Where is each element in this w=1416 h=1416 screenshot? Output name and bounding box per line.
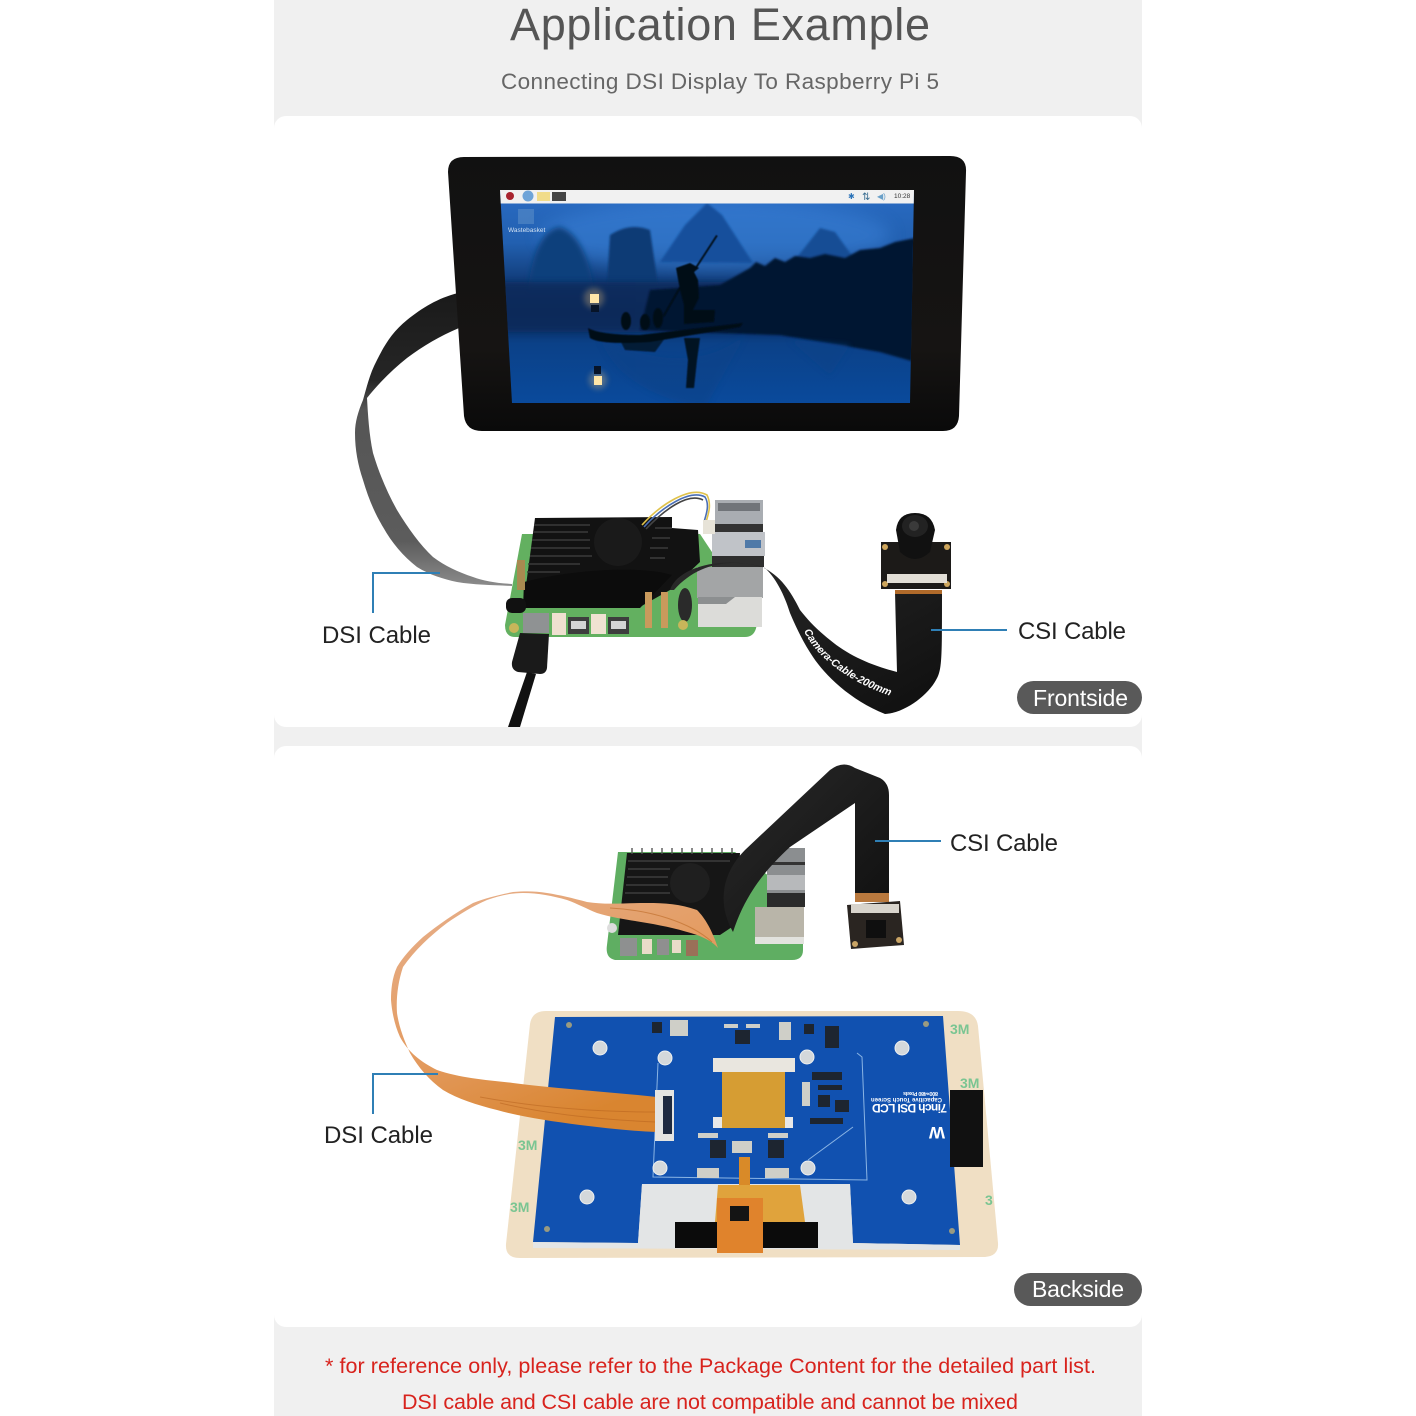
badge: Backside: Backside bbox=[1032, 1276, 1124, 1302]
blue PCB bbox=[533, 1016, 960, 1245]
lanterns bbox=[584, 288, 604, 308]
screen wallpaper: ◀) bbox=[877, 192, 886, 201]
display, front bbox=[448, 156, 966, 431]
badge: Frontside bbox=[1017, 681, 1142, 714]
standoffs and screws bbox=[580, 1041, 916, 1204]
DSI connector bbox=[655, 1090, 674, 1141]
exposed panel bbox=[533, 1184, 960, 1250]
screen wallpaper: ⇅ bbox=[862, 192, 870, 203]
screen wallpaper bbox=[498, 189, 916, 408]
boat and fisherman bbox=[588, 235, 743, 388]
badge: Frontside: Frontside bbox=[1033, 685, 1128, 711]
infographic canvas bbox=[274, 0, 1142, 1416]
DSI flex cable, back bbox=[391, 891, 718, 1132]
Raspberry Pi 5, back view bbox=[607, 848, 805, 960]
title: Application Example bbox=[510, 0, 930, 50]
page background panel bbox=[274, 0, 1142, 1416]
printed tape marks: 3M bbox=[960, 1075, 979, 1091]
DSI ribbon cable, front bbox=[355, 293, 512, 586]
CSI ribbon cable, front bbox=[670, 564, 942, 714]
panel: frontside bbox=[274, 116, 1142, 727]
callout: DSI cable front: DSI Cable bbox=[322, 622, 431, 649]
fan wires bbox=[642, 492, 709, 529]
callout: CSI cable front: CSI Cable bbox=[1018, 618, 1126, 645]
black tape right bbox=[950, 1090, 983, 1167]
printed tape marks: 3 bbox=[985, 1192, 993, 1208]
panel: backside bbox=[274, 746, 1142, 1327]
silkscreen: 7inch DSI LCD bbox=[872, 1101, 947, 1115]
silkscreen: W bbox=[928, 1123, 945, 1142]
screen wallpaper: 10:28 bbox=[894, 193, 911, 200]
touch flex bbox=[675, 1157, 818, 1253]
cable printing: Camera-Cable-200mm bbox=[805, 630, 892, 696]
heatsink with fan bbox=[523, 517, 700, 608]
footnote: DSI cable and CSI cable are not compatible and cannot be mixed bbox=[402, 1390, 1018, 1414]
camera module, back bbox=[847, 893, 904, 949]
silkscreen: Capacitive Touch Screen bbox=[871, 1096, 942, 1102]
components bbox=[652, 1022, 849, 1158]
display FFC bbox=[713, 1058, 795, 1128]
CSI ribbon cable, back bbox=[724, 764, 889, 932]
callout: DSI cable back bbox=[324, 1074, 438, 1149]
LCD panel back bbox=[506, 1011, 998, 1258]
USB-C plug and power cable bbox=[508, 613, 549, 727]
callout: DSI cable back: DSI Cable bbox=[324, 1122, 433, 1149]
outline trace bbox=[653, 1053, 867, 1180]
adhesive backing bbox=[506, 1011, 998, 1258]
callout: DSI cable front bbox=[322, 573, 440, 649]
desktop icon bbox=[518, 209, 534, 224]
footnote: * for reference only, please refer to the Package Content for the detailed part list. bbox=[325, 1354, 1096, 1378]
printed tape marks bbox=[510, 1021, 993, 1215]
printed tape marks: 3M bbox=[510, 1199, 529, 1215]
callout: CSI cable back: CSI Cable bbox=[950, 830, 1058, 857]
silkscreen bbox=[871, 1090, 947, 1142]
silkscreen: 800×480 Pixels bbox=[903, 1090, 938, 1096]
screen wallpaper: ✱ bbox=[848, 192, 855, 201]
badge: Backside bbox=[1014, 1273, 1142, 1306]
taskbar bbox=[498, 190, 916, 204]
board connectors bbox=[506, 560, 692, 635]
subtitle: Connecting DSI Display To Raspberry Pi 5 bbox=[501, 69, 939, 94]
printed tape marks: 3M bbox=[518, 1137, 537, 1153]
printed tape marks: 3M bbox=[950, 1021, 969, 1037]
USB ports bbox=[712, 500, 765, 567]
Raspberry Pi 5, front bbox=[505, 492, 765, 727]
PCB bbox=[505, 534, 757, 637]
screen wallpaper: Wastebasket bbox=[508, 227, 546, 234]
ethernet port bbox=[697, 567, 763, 627]
camera module, front bbox=[881, 513, 951, 594]
footnote bbox=[325, 1354, 1096, 1414]
